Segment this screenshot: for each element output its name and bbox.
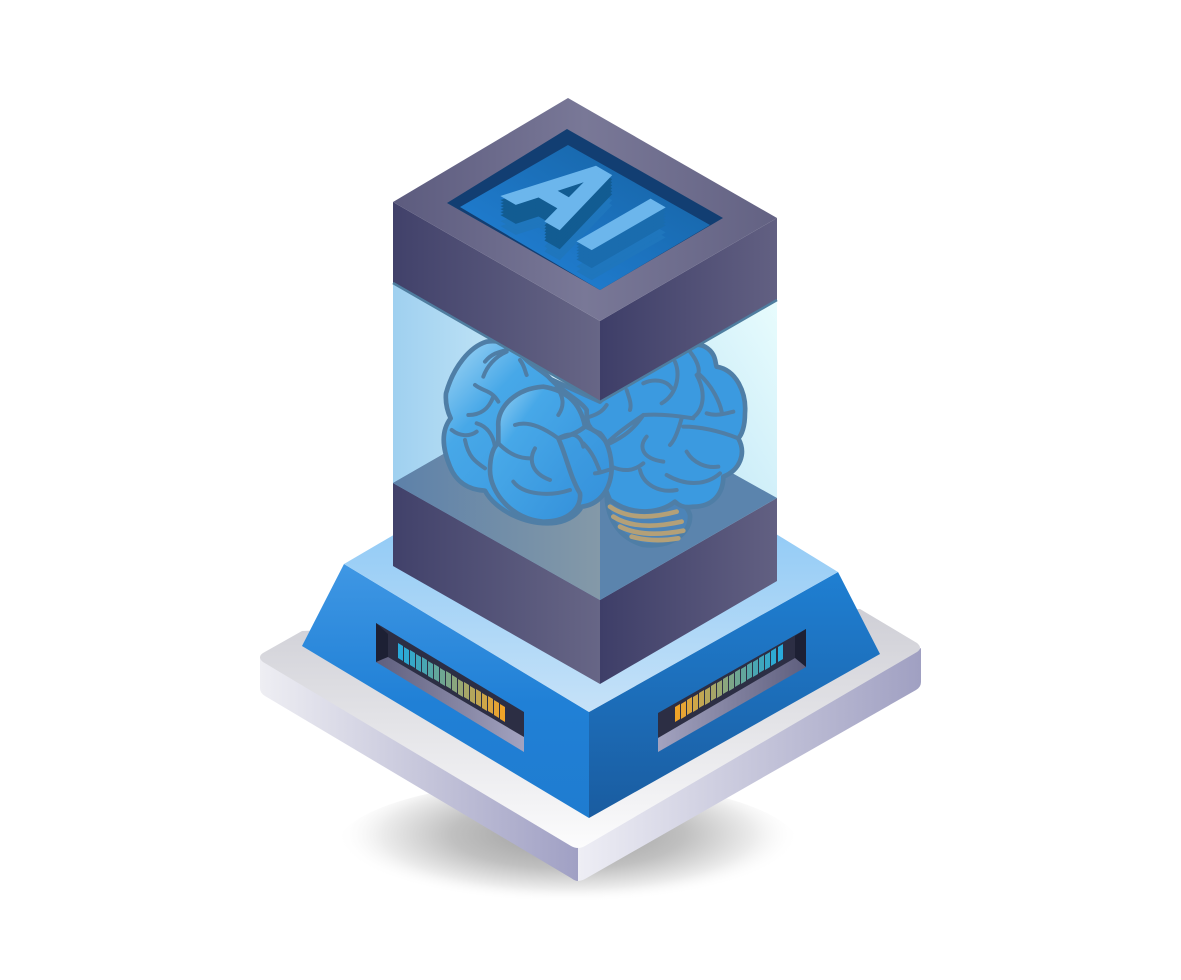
right LED display — [658, 629, 806, 752]
AI letters: I — [553, 198, 688, 276]
AI letters: A — [481, 150, 652, 248]
AI letters — [481, 143, 688, 294]
AI letters: A — [481, 159, 652, 257]
top cap — [393, 98, 777, 402]
AI letters: A — [481, 168, 652, 266]
AI letters: A — [481, 162, 652, 260]
left hemisphere — [444, 341, 612, 523]
AI letters: I — [553, 192, 688, 270]
AI letters: I — [553, 204, 688, 282]
LED bars: left — [398, 643, 505, 722]
left LED display — [376, 623, 524, 752]
chamber floor — [393, 382, 777, 600]
AI letters: A — [481, 153, 652, 251]
AI letters: I — [553, 201, 688, 279]
AI letters: A — [481, 173, 652, 271]
blue pedestal — [302, 420, 880, 818]
front lobe — [490, 387, 585, 522]
right hemisphere — [545, 345, 745, 511]
brain — [444, 341, 745, 545]
AI letters: A — [481, 156, 652, 254]
AI letters: I — [553, 211, 688, 289]
AI letters: A — [481, 147, 652, 245]
glass chamber back — [393, 283, 777, 600]
LED bars: right — [675, 644, 783, 722]
brain stem — [607, 493, 690, 545]
ground shadow — [336, 780, 800, 916]
platform base — [260, 609, 921, 881]
AI letters: I — [553, 195, 688, 273]
lower block — [393, 382, 777, 684]
AI letters: I — [553, 189, 688, 267]
AI letters: I — [553, 186, 688, 264]
brain folds — [452, 350, 738, 494]
AI letters: I — [553, 216, 688, 294]
AI well — [447, 129, 723, 290]
AI letters: A — [481, 143, 652, 241]
